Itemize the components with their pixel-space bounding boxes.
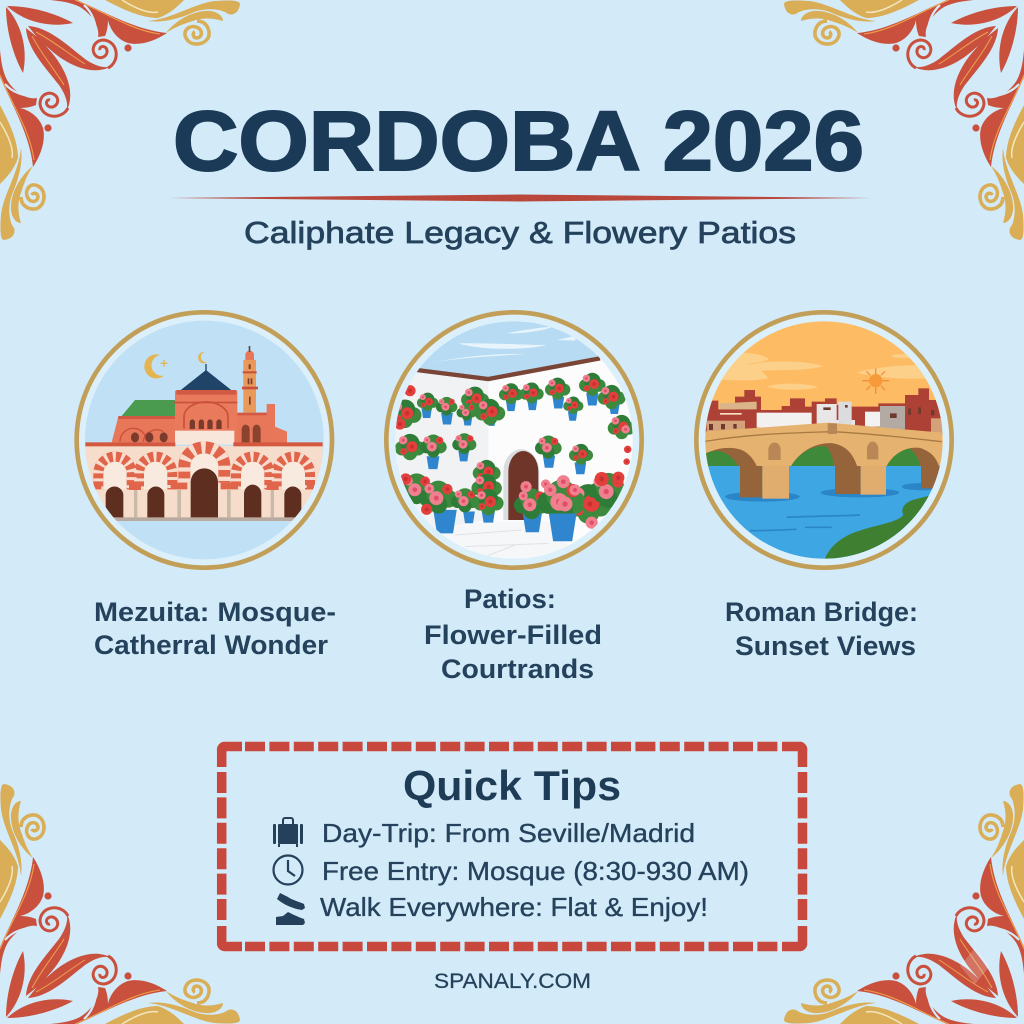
icon: shoes [276,893,305,925]
panel: Roman Bridge [696,312,952,661]
caption: Mezquita: Catherral Wonder [94,630,329,660]
icon: clock [274,856,302,884]
heading: Quick Tips [403,762,621,809]
illustration: Patio medallion [386,312,642,568]
caption: Patios: Patios: [464,584,556,614]
panel: Quick Tips [222,746,803,947]
title underline [168,194,872,202]
ornament: bottom-right corner [784,784,1024,1024]
ornament: top-left corner [0,0,240,240]
panel: Mezquita [77,312,336,660]
caption: Roman Bridge [725,597,918,661]
subtitle: Caliphate Legacy & Flowery Patios [244,215,796,250]
footer: SPANALY.COM [434,970,591,993]
tip: day trip: Day-Trip: From Seville/Madrid [322,818,695,848]
icon: suitcase [273,818,303,847]
dashed border [222,746,803,947]
illustration: Roman Bridge medallion [696,312,952,568]
caption: Patios: Flower-Filled [424,620,602,650]
caption: Mezquita: Mezuita: Mosque- [94,597,336,627]
illustration: Mezquita medallion [77,312,332,568]
title: CORDOBA 2026 [173,94,864,188]
caption: Roman Bridge: Roman Bridge: [725,597,918,627]
tip: free entry: Free Entry: Mosque (8:30-930 AM) [322,856,749,886]
tip: walk everywhere: Walk Everywhere: Flat & Enjoy! [320,892,708,922]
caption: Patios [424,584,602,684]
caption: Mezquita [94,597,336,660]
ornament: bottom-left corner [0,784,240,1024]
caption: Patios: Courtrands [441,654,594,684]
watermark [960,948,990,984]
caption: Roman Bridge: Sunset Views [735,631,916,661]
panel: Patios [386,312,642,684]
ornament: top-right corner [784,0,1024,240]
